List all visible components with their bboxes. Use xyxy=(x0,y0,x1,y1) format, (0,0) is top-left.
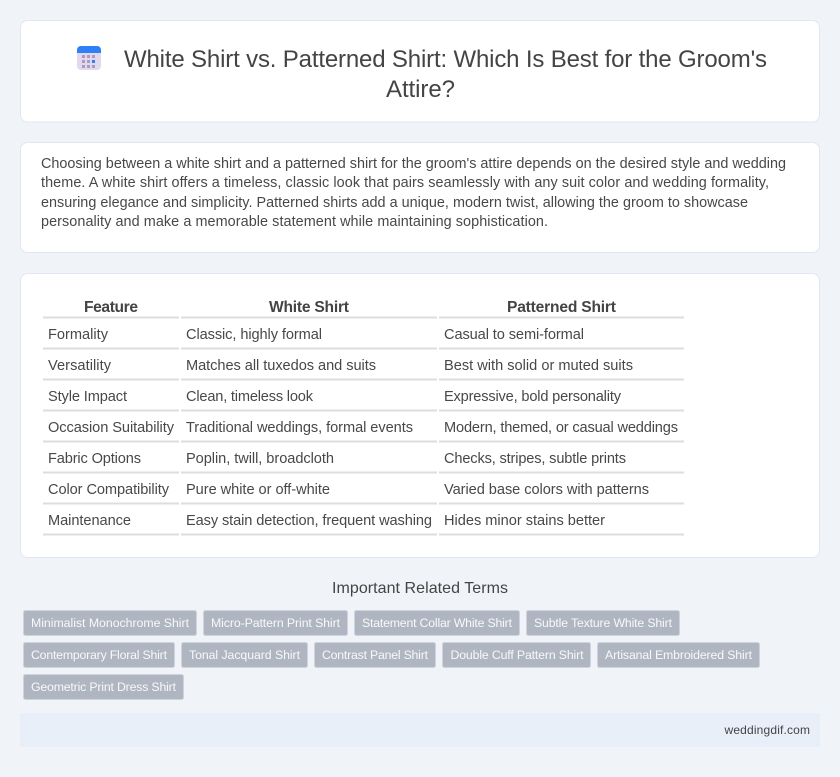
title: White Shirt vs. Patterned Shirt: Which Is Best for the Groom's xyxy=(124,46,767,73)
heading: related terms: Important Related Terms xyxy=(332,580,508,597)
row: fabric options: Fabric Options xyxy=(48,451,141,467)
tag: Statement Collar White Shirt xyxy=(362,616,513,630)
tag group: related terms xyxy=(24,610,760,700)
row: fabric options xyxy=(48,451,626,467)
table rules xyxy=(43,318,684,534)
row: versatility: Versatility xyxy=(48,358,112,374)
title: Attire? xyxy=(386,76,455,103)
row: formality: Casual to semi-formal xyxy=(444,327,584,343)
row: occasion suitability: Modern, themed, or casual weddings xyxy=(444,420,678,436)
intro text block: personality and make a memorable statement while maintaining sophistication. xyxy=(41,214,548,230)
table header row xyxy=(84,299,616,316)
tag xyxy=(442,642,590,668)
row: fabric options: Poplin, twill, broadcloth xyxy=(186,451,334,467)
footer bar: weddingdif.com xyxy=(724,723,810,737)
tag xyxy=(526,610,680,636)
tag xyxy=(24,610,196,636)
table header row: Feature xyxy=(84,299,138,316)
tag xyxy=(182,642,308,668)
row: color compatibility: Varied base colors with patterns xyxy=(444,482,649,498)
row: maintenance: Hides minor stains better xyxy=(444,513,605,529)
tag xyxy=(204,610,348,636)
tag: Micro-Pattern Print Shirt xyxy=(211,616,341,630)
row: occasion suitability xyxy=(48,420,678,436)
row: versatility: Matches all tuxedos and suits xyxy=(186,358,376,374)
row: color compatibility xyxy=(48,482,649,498)
row: maintenance: Maintenance xyxy=(48,513,131,529)
intro text block: Choosing between a white shirt and a patterned shirt for the groom's attire depends on the desired style and wedding xyxy=(41,156,786,172)
table header row: White Shirt xyxy=(269,299,349,316)
row: style impact: Clean, timeless look xyxy=(186,389,314,405)
row: formality xyxy=(48,327,584,343)
intro text block xyxy=(41,156,786,230)
title xyxy=(124,46,767,103)
tag: Geometric Print Dress Shirt xyxy=(31,680,177,694)
intro text block: theme. A white shirt offers a timeless, classic look that pairs seamlessly with any suit color and wedding formality, xyxy=(41,175,769,191)
panel: comparison table xyxy=(20,274,820,558)
tag: Minimalist Monochrome Shirt xyxy=(31,616,190,630)
row: style impact: Style Impact xyxy=(48,389,127,405)
row: occasion suitability: Occasion Suitability xyxy=(48,420,175,436)
row: color compatibility: Pure white or off-white xyxy=(186,482,330,498)
row: formality: Formality xyxy=(48,327,109,343)
row: maintenance: Easy stain detection, frequent washing xyxy=(186,513,432,529)
tag xyxy=(24,642,174,668)
tag: Contrast Panel Shirt xyxy=(322,648,429,662)
tag: Tonal Jacquard Shirt xyxy=(189,648,301,662)
tag: Double Cuff Pattern Shirt xyxy=(450,648,584,662)
row: formality: Classic, highly formal xyxy=(186,327,322,343)
footer bar xyxy=(20,713,820,747)
tag: Subtle Texture White Shirt xyxy=(534,616,673,630)
row: style impact xyxy=(48,389,622,405)
panel: intro paragraph xyxy=(20,142,820,252)
row: style impact: Expressive, bold personality xyxy=(444,389,622,405)
tag xyxy=(598,642,760,668)
row: maintenance xyxy=(48,513,605,529)
tag xyxy=(24,674,184,700)
tag: Contemporary Floral Shirt xyxy=(31,648,168,662)
tag xyxy=(354,610,520,636)
row: versatility xyxy=(48,358,633,374)
icon: calendar xyxy=(77,46,101,70)
row: fabric options: Checks, stripes, subtle prints xyxy=(444,451,626,467)
row: occasion suitability: Traditional weddings, formal events xyxy=(186,420,413,436)
tag: Artisanal Embroidered Shirt xyxy=(605,648,753,662)
tag xyxy=(314,642,436,668)
intro text block: ensuring elegance and simplicity. Patterned shirts add a unique, modern twist, allowing the groom to showcase xyxy=(41,195,748,211)
row: color compatibility: Color Compatibility xyxy=(48,482,170,498)
header panel xyxy=(20,20,820,122)
row: versatility: Best with solid or muted suits xyxy=(444,358,633,374)
table header row: Patterned Shirt xyxy=(507,299,616,316)
